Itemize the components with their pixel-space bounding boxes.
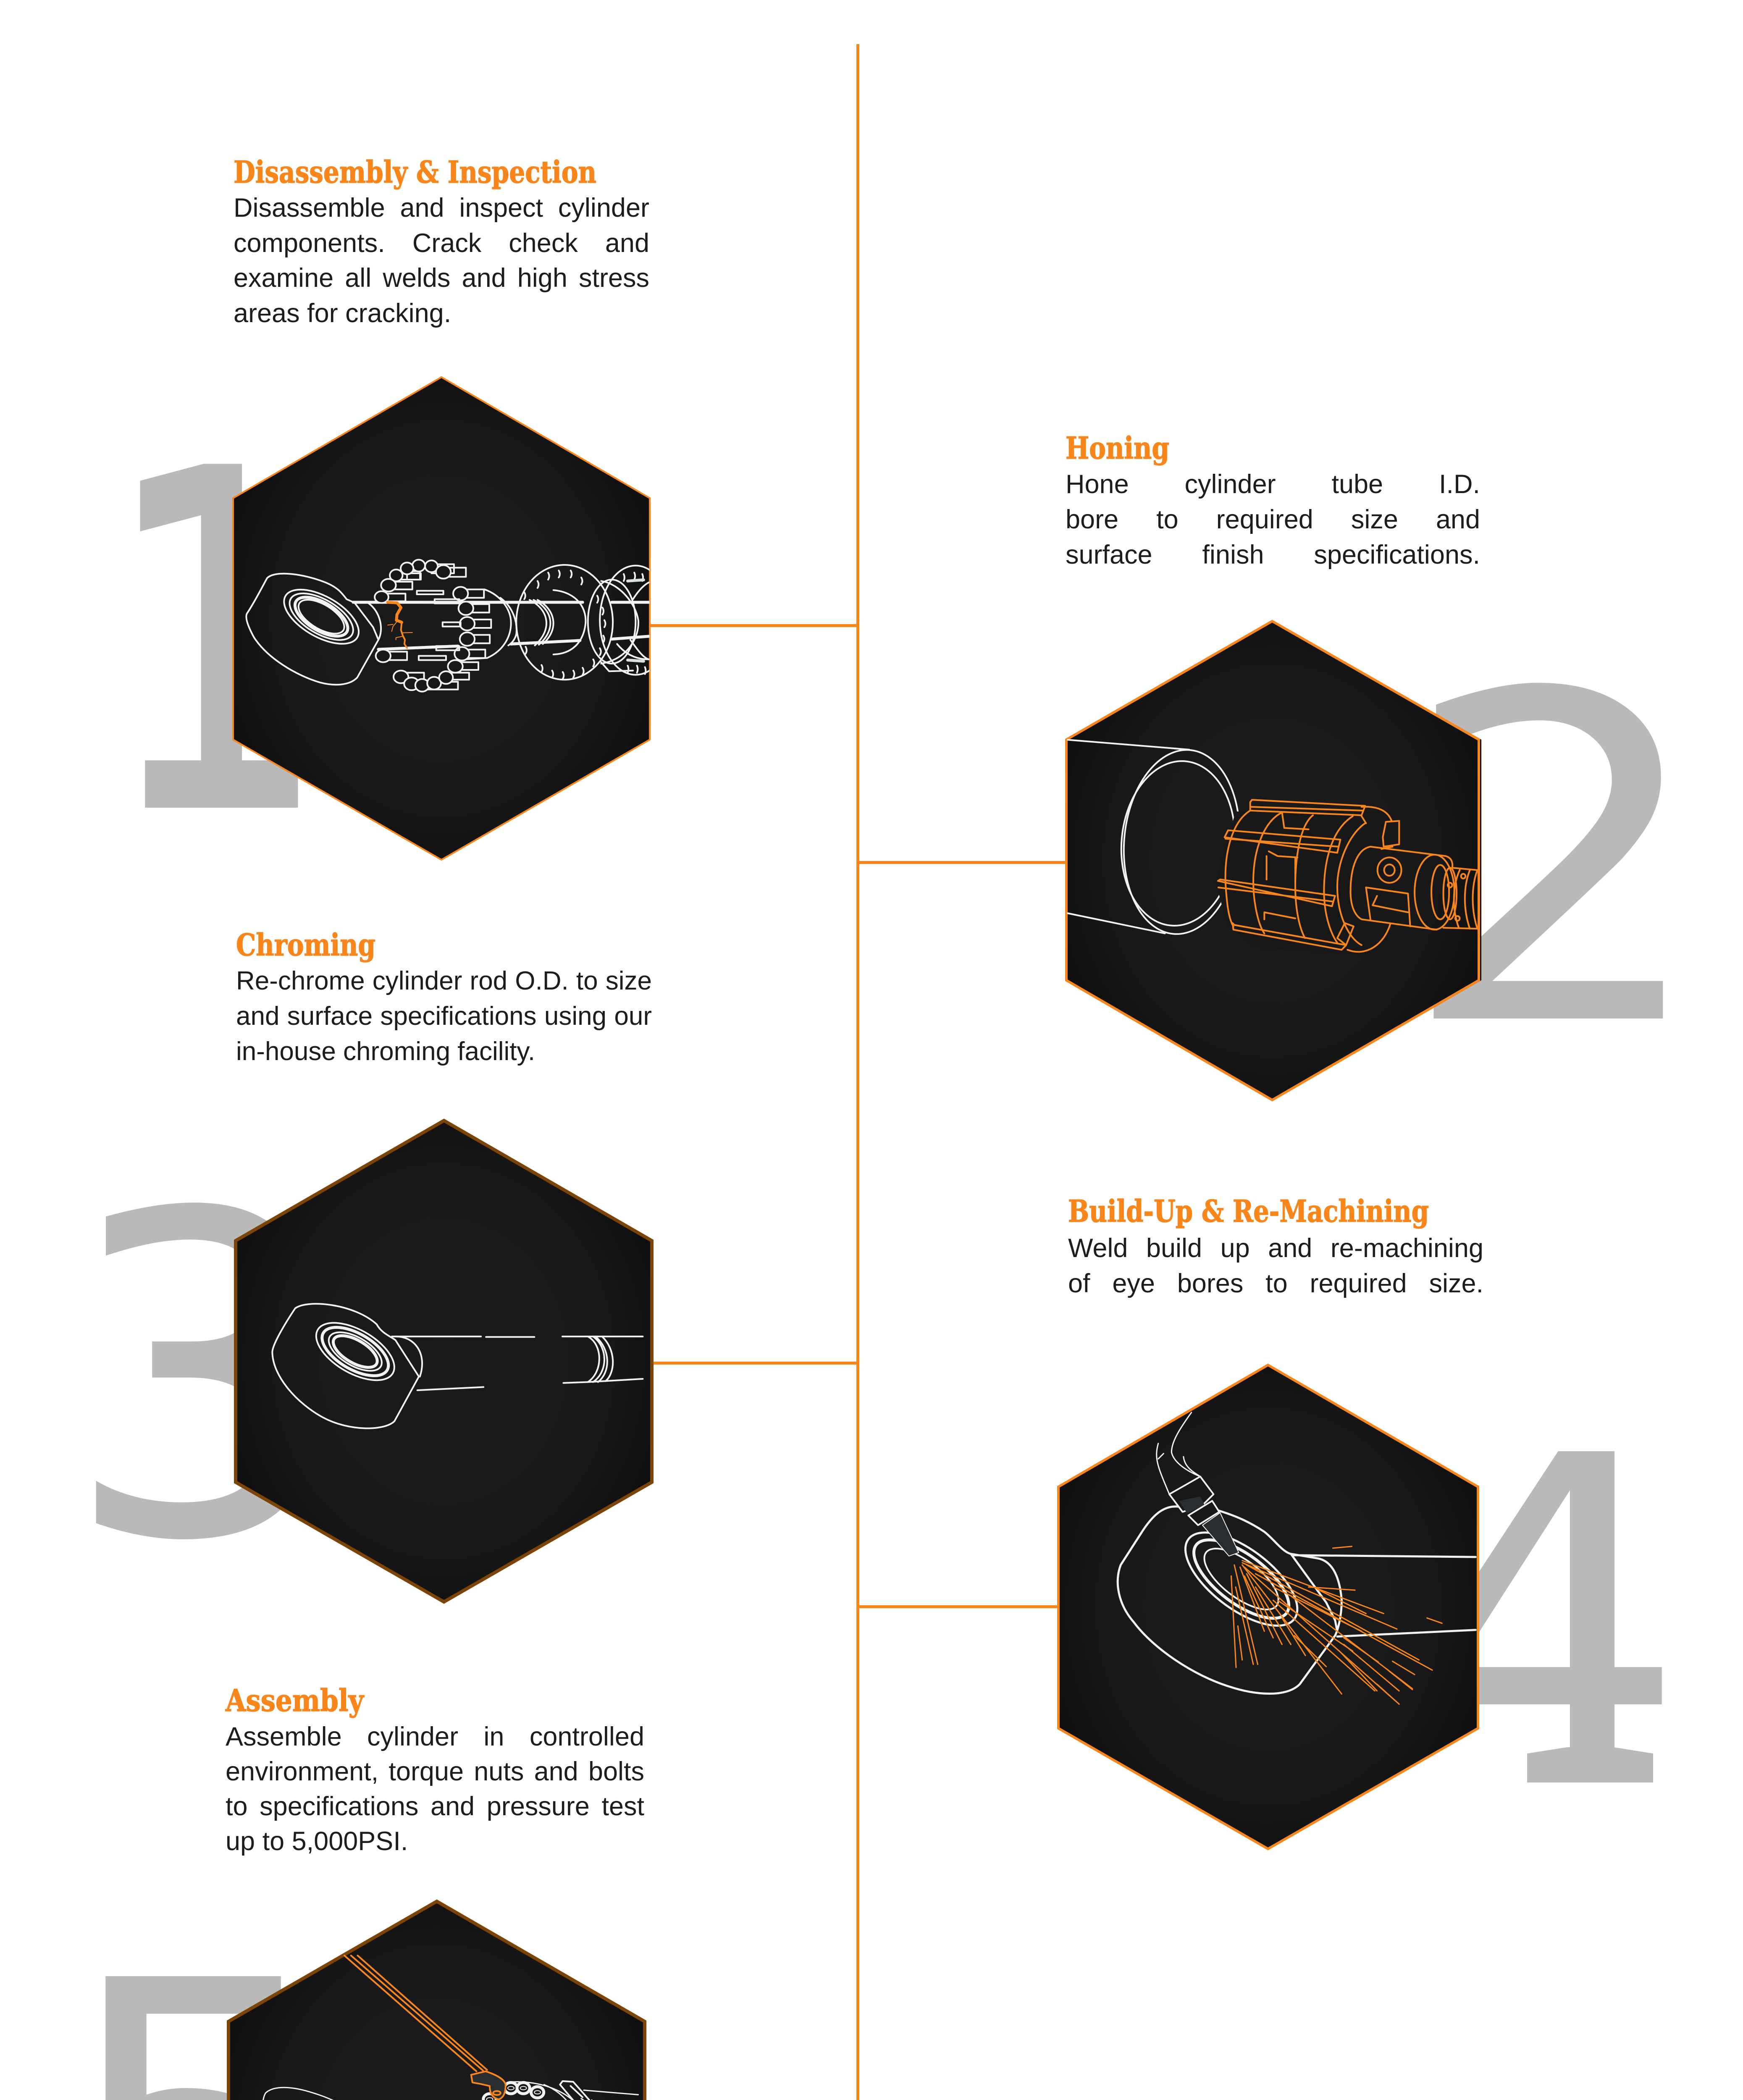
- text block: step 3 body: and surface specifications using our: [236, 1002, 652, 1031]
- panel: step 1 disassembly and inspection: [140, 159, 651, 861]
- text block: step 3 body: Re-chrome cylinder rod O.D. to size: [236, 966, 652, 995]
- text block: step 1 body: examine all welds and high stress: [234, 263, 649, 293]
- icon: chromed cylinder rod: [272, 1304, 643, 1428]
- text block: step 1 body: components. Crack check and: [234, 228, 649, 258]
- connector: step 2: [858, 861, 1066, 864]
- text block: step 4 body: Weld build up and re-machining: [1068, 1234, 1483, 1263]
- text block: step 2 body: [1066, 467, 1480, 572]
- hexagon 5: [228, 1901, 645, 2100]
- heading: Honing: Honing: [1066, 430, 1169, 466]
- text block: step 3 body: in-house chroming facility.: [236, 1037, 535, 1066]
- text block: step 3 body: [236, 963, 652, 1069]
- text block: step 5 body: [226, 1719, 644, 1859]
- hexagon 1: [233, 377, 650, 860]
- hexagon 4: [1058, 1365, 1478, 1849]
- hexagon 2: [1066, 621, 1481, 1100]
- text block: step 5 body: to specifications and pressure test: [226, 1792, 644, 1821]
- text block: step 5 body: Assemble cylinder in controlled: [226, 1722, 644, 1751]
- text block: step 2 body: bore to required size and: [1066, 505, 1480, 534]
- icon: exploded cylinder with crack: [246, 560, 672, 692]
- panel: step 4 build-up and re-machining: [1058, 1193, 1687, 1890]
- connector: step 3: [652, 1362, 858, 1365]
- text block: step 5 body: up to 5,000PSI.: [226, 1827, 408, 1856]
- icon: cylinder assembly with torque wrenches: [246, 1956, 640, 2100]
- heading: Chroming: Chroming: [236, 927, 375, 963]
- text block: step 2 body: surface finish specifications.: [1066, 540, 1480, 570]
- text block: step 1 body: areas for cracking.: [234, 299, 451, 328]
- timeline spine: [856, 44, 859, 2100]
- big number 1: 1: [105, 377, 326, 911]
- heading: Assembly: Assembly: [225, 1683, 365, 1718]
- hexagon 3: [236, 1121, 652, 1602]
- panel: step 2 honing: [1065, 435, 1663, 1101]
- panel: step 3 chroming: [62, 927, 652, 1638]
- panel: step 5 assembly: [57, 1683, 645, 2100]
- text block: step 1 body: [234, 191, 649, 331]
- icon: welding torch with sparks: [1118, 1412, 1475, 1704]
- connector: step 4: [858, 1605, 1058, 1608]
- big number 3: 3: [62, 1120, 345, 1638]
- heading: Build-Up & Re-Machining: Build-Up & Re-Machining: [1068, 1193, 1429, 1229]
- connector: step 1: [650, 624, 858, 627]
- text block: step 4 body: of eye bores to required size.: [1068, 1269, 1483, 1298]
- icon: honing head in cylinder tube: [1068, 740, 1479, 957]
- big number 4: 4: [1398, 1361, 1687, 1890]
- big number 2: 2: [1397, 599, 1712, 1126]
- text block: step 5 body: environment, torque nuts and bolts: [226, 1757, 644, 1786]
- text block: step 4 body: [1068, 1231, 1483, 1301]
- text block: step 2 body: Hone cylinder tube I.D.: [1066, 470, 1480, 499]
- heading: Disassembly & Inspection: Disassembly & Inspection: [234, 154, 596, 190]
- text block: step 1 body: Disassemble and inspect cylinder: [234, 193, 649, 223]
